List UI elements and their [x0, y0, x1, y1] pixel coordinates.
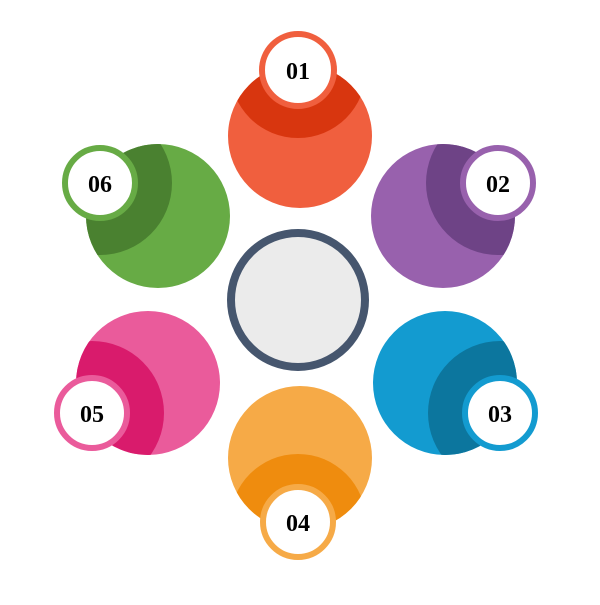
center circle — [231, 233, 365, 367]
item 01 — [228, 31, 372, 208]
item 06 — [62, 144, 230, 288]
item 03 — [373, 311, 538, 455]
item 02: 02 — [486, 172, 510, 198]
item 03: 03 — [488, 402, 512, 428]
item 04 — [228, 386, 372, 560]
item 05: 05 — [80, 402, 104, 428]
item 04: 04 — [286, 511, 310, 537]
item 05 — [54, 311, 220, 455]
item 02 — [371, 144, 536, 288]
item 01: 01 — [286, 59, 310, 85]
item 06: 06 — [88, 172, 112, 198]
